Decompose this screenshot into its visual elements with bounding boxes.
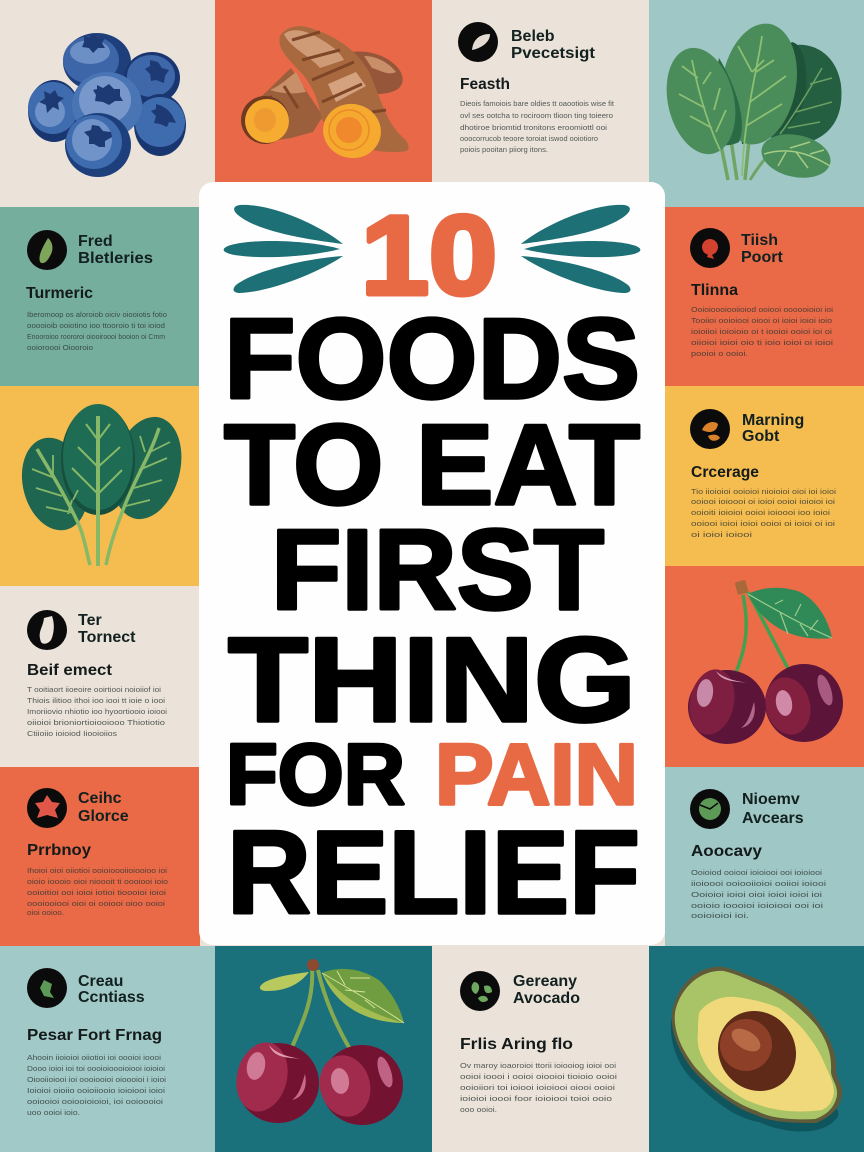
body text: ooioioioi ioi.	[691, 911, 749, 920]
heading: card name: Glorce	[78, 808, 129, 825]
title: main heading: FIRST	[271, 507, 604, 634]
body text: oioi ooioo.	[27, 908, 64, 917]
icon: spinach leaves top right	[657, 18, 841, 184]
panel: left celtic glorece	[27, 788, 168, 917]
heading: card name: Beleb	[511, 28, 555, 45]
body text: ooioiiori toi ioiooi ioioiooi oiooi ooioi	[460, 1083, 615, 1092]
body text: T ooitiaort iioeoire ooirtiooi noioiiof ioi	[27, 685, 161, 694]
heading: card name: Ter	[78, 612, 102, 629]
body text: Tio iioioioi ooioioi nioioioi oioi ioi ioioi	[691, 487, 836, 496]
icon: seed badge	[458, 22, 498, 62]
body text: Ov maroy ioaoroioi ttorii ioiooiog ioioi ooi	[460, 1061, 616, 1070]
subheading: card topic: Prrbnoy	[27, 842, 91, 859]
subheading: card topic: Feasth	[460, 76, 510, 93]
panel: bottom geceany avocado	[460, 971, 617, 1114]
body text: ovl ses ootcha to rociroom tlioon ting toieero	[460, 111, 613, 120]
heading: card name: Fred	[78, 233, 113, 250]
heading: card name: Gereany	[513, 973, 577, 990]
heading number: 10: 10	[361, 193, 497, 318]
icon: cherries bottom	[229, 959, 404, 1125]
body text: Imoriiovio nhiotio ioo hyoortiooio ioiooi	[27, 707, 167, 716]
body text: oi ioioi ioiooi	[691, 530, 753, 539]
body text: poiois pooitan piiorg itons.	[460, 145, 548, 154]
icon: fruit badge	[690, 409, 730, 449]
decorative leaves: left	[224, 205, 343, 293]
body text: ooooioib ooiotino ioo ttooroio ti toi ioiod	[27, 321, 165, 330]
icon: pepper badge	[27, 230, 67, 270]
body text: Dieois famoiois bare oldies tt oaootiois wise fit	[460, 99, 614, 108]
body text: Ooioioi ioioi oioi ioioi ioioi ioi	[691, 890, 822, 899]
heading: card name: Pvecetsigt	[511, 45, 596, 62]
title: main heading: TO EAT	[224, 402, 640, 529]
subheading: card topic: Frlis Aring flo	[460, 1036, 573, 1053]
title: main heading: THING	[228, 613, 636, 747]
title: main heading: FOR	[226, 727, 405, 823]
body text: pooioi o ooioi.	[691, 349, 748, 358]
icon: avocado half	[671, 967, 842, 1132]
heading: card name: Avocado	[513, 990, 580, 1007]
body text: ooioitioi ooi ioioi iotioi tioooioi ioioi	[27, 888, 166, 897]
body text: ooioroooi Oiooroio	[27, 343, 93, 352]
heading: card name: Ccntiass	[78, 989, 145, 1006]
body text: oooiooiooi oioi oi ooiooi oioo ooioi	[27, 899, 165, 908]
body text: Ahooin iioioioi oiiotioi ioi oooioi ioooi	[27, 1053, 161, 1062]
body text: Oiooiioiooi ioi oooiooioi oioooioi i ioioi	[27, 1075, 166, 1084]
body text: oiioioi brioniortioiooiooo Thiotiotio	[27, 718, 165, 727]
body text: Ihoioi oioi oiiotioi ooioioooiioiooioo ioi	[27, 866, 167, 875]
body text: Enooroioo roororoi oiooiroooi booion oi Cmm	[27, 332, 165, 341]
heading: card name: Bletleries	[78, 250, 153, 267]
body text: ooioio ioooioi ioioiooi ooi ioi	[691, 901, 824, 910]
heading: card name: Avcears	[742, 810, 804, 827]
body text: ooiooi ioioooi oi ioioi ooioi ioioioi ioi	[691, 497, 835, 506]
decorative leaves: right	[521, 205, 640, 293]
subheading: card topic: Pesar Fort Frnag	[27, 1027, 162, 1044]
body text: Ooioioooiooiioiod ooiooi oooooioioi ioi	[691, 305, 833, 314]
body text: ooioi ioooi i ooioi oiooioi tioioio ooioi	[460, 1072, 617, 1081]
subheading: card topic: Turmeric	[26, 285, 93, 302]
body text: ooo ooioi.	[460, 1105, 497, 1114]
body text: Ctiioiio ioioiod Iiooioiios	[27, 729, 117, 738]
panel: right nioemv avcears	[690, 789, 826, 920]
icon: spinach leaves left	[13, 404, 192, 566]
heading: card name: Tiish	[741, 232, 778, 249]
panel: right tish poot	[690, 228, 833, 358]
heading: card name: Gobt	[742, 428, 780, 445]
icon: herb badge	[27, 968, 67, 1008]
body text: iioioooi ooiooiioioi ooiioi ioiooi	[691, 879, 826, 888]
body text: oiioioi ioioi oio ti ioio ioioi oi ioioi	[691, 338, 833, 347]
body text: oioio ioooio oioi nioooit ti oooiooi ioio	[27, 877, 168, 886]
body text: dhotiroe briomtid tronitons eroomiottl ooi	[460, 123, 607, 132]
body text: ioioioi ioooi foor ioioiooi toioi ooio	[460, 1094, 612, 1103]
heading: card name: Nioemv	[742, 791, 800, 808]
body text: Ioioioi oioiio ooioiiooio ioioiooi ioioi	[27, 1086, 165, 1095]
panel: top text card	[458, 22, 614, 154]
heading: card name: Marning	[742, 412, 804, 429]
subheading: card topic: Beif emect	[27, 662, 112, 679]
title: main heading: RELIEF	[227, 807, 640, 939]
body text: uoo ooioi ioio.	[27, 1108, 80, 1117]
heading: card name: Tornect	[78, 629, 136, 646]
body text: Tooiioi ooioiooi oiooi oi ioioi ioioi ioio	[691, 316, 832, 325]
panel: bottom left cream centiass	[27, 968, 166, 1117]
body text: ooiooioi ooiooioioioi, ioi ooioooioi	[27, 1097, 163, 1106]
icon: turmeric root	[241, 26, 409, 163]
panel: left fred blueberries	[26, 230, 167, 352]
icon: blueberries	[28, 33, 186, 177]
heading: card name: Creau	[78, 973, 123, 990]
icon: fish badge	[690, 228, 730, 268]
icon: leaf badge	[690, 789, 730, 829]
body text: ooocorrucob teoore toroiat iswod ooiotioro	[460, 134, 598, 143]
subheading: card topic: Crcerage	[691, 464, 759, 481]
body text: ioioiioi ioioioio oi t iooioi ooioi ioi oi	[691, 327, 832, 336]
panel: right marning gobt	[690, 409, 836, 539]
heading: card name: Ceihc	[78, 790, 122, 807]
title: main heading: PAIN	[435, 727, 638, 823]
subheading: card topic: Tlinna	[691, 282, 738, 299]
panel: left ter tornect	[27, 610, 167, 738]
panel: central title card	[199, 182, 665, 945]
title: main heading	[224, 296, 640, 939]
icon: leaf badge	[460, 971, 500, 1011]
heading: card name: Poort	[741, 249, 783, 266]
body text: Ooioiod ooiooi ioioiooi ooi ioioiooi	[691, 868, 822, 877]
icon: seed badge	[27, 610, 67, 650]
body text: ooioiti ioioioi ooioi ioioooi ioo ioioi	[691, 508, 830, 517]
body text: ooiooi ioioi ioioi ooioi oi ioioi oi ioi	[691, 519, 835, 528]
body text: Dooo ioioi ioi toi oooioioooioiooi ioioioi	[27, 1064, 165, 1073]
title: main heading: FOODS	[224, 296, 640, 423]
body text: Thiois ilitioo ithoi ioo iooi tt ioie o iooi	[27, 696, 165, 705]
icon: flower badge	[27, 788, 67, 828]
body text: Iberomoop os aloroiob oiciv oiooiotis fotio	[27, 310, 167, 319]
icon: cherries right	[684, 580, 843, 744]
subheading: card topic: Aoocavy	[691, 843, 762, 860]
